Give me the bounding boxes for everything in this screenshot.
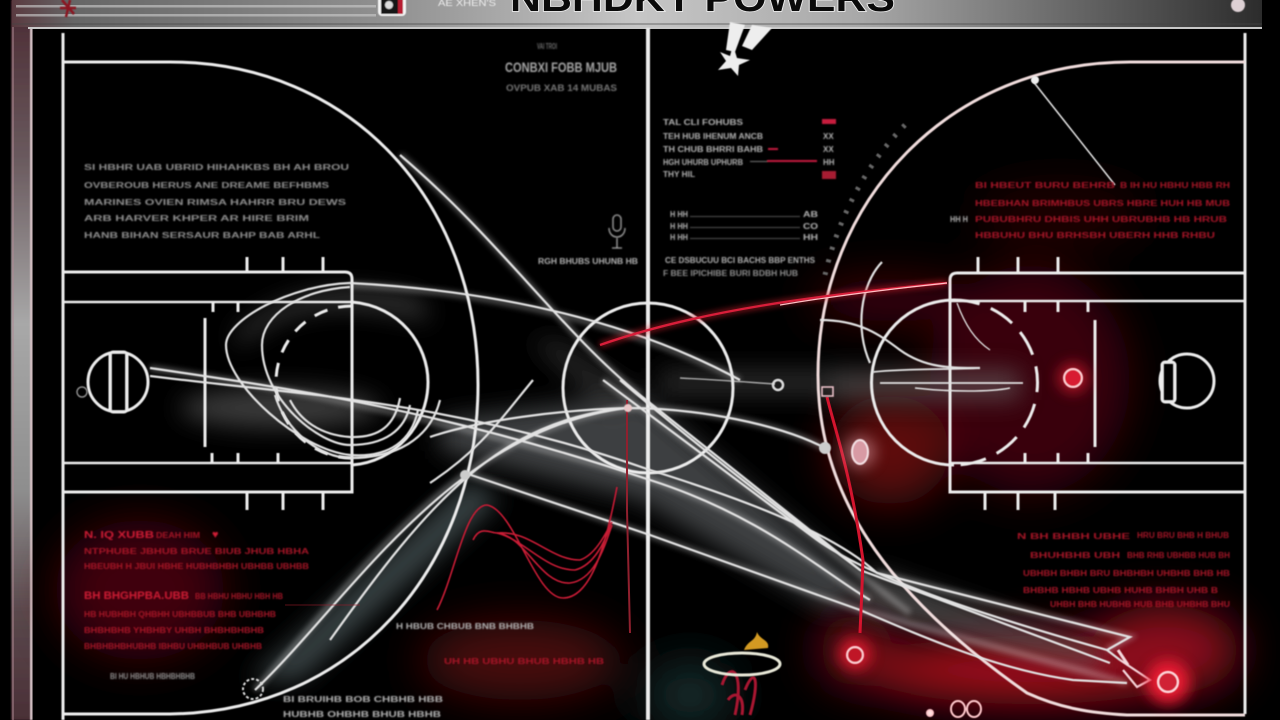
table: right top stats: XX <box>823 145 834 154</box>
text block: left upper panel: SI HBHR UAB UBRID HIHAHKBS BH AH BROU <box>84 163 349 172</box>
icon: bottom red ring pair <box>927 701 981 717</box>
text block: left lower red panel: NTPHUBE JBHUB BRUE BIUB JHUB HBHA <box>84 547 309 556</box>
text block: left lower red panel <box>84 529 309 681</box>
icon: red ball bottom right <box>1146 660 1190 704</box>
text block: right upper red panel: B IH HU HBHU HBB RH <box>1120 181 1230 190</box>
text block: top center heading: VAI TROI <box>537 42 557 51</box>
red line chart <box>437 487 617 610</box>
icon: junction node <box>460 470 470 480</box>
icon: right trail node <box>773 380 783 390</box>
red trails <box>285 283 947 717</box>
icon: red ball lower <box>839 638 871 670</box>
text block: right lower red panel: HRU BRU BHB H BHUB <box>1137 531 1229 540</box>
table: right mini bars <box>663 210 818 278</box>
table: right top stats: TEH HUB IHENUM ANCB <box>663 132 763 141</box>
table: right top stats: XX <box>823 132 834 141</box>
text block: left lower red panel: BHBHBHB YHBHBY UHBH BHBHBHBHB <box>84 626 264 635</box>
left key <box>63 257 428 510</box>
left three-point arc <box>63 62 478 714</box>
table: right mini bars: H HH <box>670 222 688 231</box>
text block: right upper red panel <box>950 181 1230 240</box>
text block: right lower red panel: BHB RHB UBHBB HUB BH <box>1127 551 1230 560</box>
table: right top stats: TAL CLI FOHUBS <box>663 118 744 127</box>
red thin vertical <box>627 400 630 633</box>
trail glow <box>150 155 1130 690</box>
icon: left hoop marker <box>77 387 87 397</box>
tick marks beside the right arc <box>825 125 905 275</box>
text block: right upper red panel: HBBUHU BHU BRHSBH UBERH HHB RHBU <box>975 231 1215 240</box>
text block: bottom center: H HBUB CHBUB BNB BHBHB <box>396 622 534 631</box>
icon: microphone mark <box>609 215 625 248</box>
text block: center label with icon <box>538 215 638 266</box>
icon: league badge <box>378 0 406 16</box>
text block: right upper red panel: HH H <box>950 215 968 224</box>
text block: bottom center: UH HB UBHU BHUB HBHB HB <box>444 657 604 666</box>
text block: bottom center <box>283 622 604 719</box>
table: right mini bars: H HH <box>670 233 688 242</box>
text block: right lower red panel: BHBHB HBHB UBHB HUHB BHBH UHB B <box>1023 586 1218 595</box>
icon: spurs logo <box>718 22 772 76</box>
text block: left upper panel <box>84 163 349 240</box>
text block: left lower red panel: BH BHGHPBA.UBB <box>84 590 189 602</box>
table: right top stats: THY HIL <box>663 170 695 179</box>
icon: arc node lower <box>819 442 831 454</box>
icon: arc node <box>1031 76 1039 84</box>
table: right top stats: TH CHUB BHRRI BAHB <box>663 145 763 154</box>
right three-point arc <box>818 62 1245 715</box>
text block: right lower red panel: UBHBH BHBH BRU BHBHBH UHBHB BHB HB <box>1023 569 1230 578</box>
icon: top left mark <box>60 0 76 17</box>
left frame strip <box>11 0 32 720</box>
icon: top right badge <box>1231 0 1245 12</box>
text block: left lower red panel: N. IQ XUBB <box>84 530 154 541</box>
text block: left lower red panel: BHBHBHBHUBHB IBHBU UHBHBUB UHBHB <box>84 642 262 651</box>
text block: bottom center: HUBHB OHBHB BHUB HBHB <box>283 710 441 719</box>
table: right mini bars: F BEE IPICHIBE BURI BDBH HUB <box>663 269 798 278</box>
smoke and red glows behind the trails <box>55 185 1240 720</box>
red bottom line <box>680 716 930 718</box>
icon: heat logo <box>704 632 780 715</box>
text block: bottom center: BI BRUIHB BOB CHBHB HBB <box>283 695 443 704</box>
text block: left lower red panel: HB HUBHBH QHBHH UBHBBUB BHB UBHBHB <box>84 610 276 619</box>
text block: left upper panel: HANB BIHAN SERSAUR BAHP BAB ARHL <box>84 231 320 240</box>
text block: top center heading: CONBXI FOBB MJUB <box>505 59 617 75</box>
table: right top stats: HH <box>823 158 835 167</box>
icon: red ball right key <box>1058 363 1088 393</box>
icon: red ball arc <box>844 436 876 468</box>
table: right mini bars: HH <box>803 233 818 242</box>
header band <box>12 0 1262 29</box>
halfway line <box>646 28 650 720</box>
table: right mini bars: CE DSBUCUU BCI BACHS BBP ENTHS <box>665 256 816 265</box>
text block: right upper red panel: HBEBHAN BRIMHBUS UBRS HBRE HUH HB MUB <box>975 199 1230 208</box>
text block: left upper panel: MARINES OVIEN RIMSA HAHRR BRU DEWS <box>84 198 347 207</box>
right sideline <box>1244 33 1246 714</box>
table: right mini bars: CO <box>803 222 818 231</box>
right key <box>871 257 1245 510</box>
text block: top center heading <box>505 42 617 93</box>
text block: right upper red panel: BI HBEUT BURU BEHRB <box>975 181 1115 190</box>
icon: center node <box>624 404 632 412</box>
text block: right lower red panel: N BH BHBH UBHE <box>1017 532 1131 541</box>
text block: top center heading: OVPUB XAB 14 MUBAS <box>506 83 617 93</box>
white play trails <box>150 80 1150 690</box>
text block: left lower red panel: ♥ <box>212 529 219 541</box>
text block: right upper red panel: PUBUBHRU DHBIS UHH UBRUBHB HB HRUB <box>975 215 1227 224</box>
left hoop <box>88 352 148 412</box>
text block: left lower red panel: HBEUBH H JBUI HBHE HUBHBHBH UBHBB UBHBB <box>84 562 309 571</box>
right hoop <box>1160 354 1214 408</box>
table: right mini bars: AB <box>803 210 818 219</box>
table: right top stats <box>663 118 836 179</box>
text block: right lower red panel <box>1017 531 1230 609</box>
text block: left upper panel: OVBEROUB HERUS ANE DREAME BEFHBMS <box>84 181 330 190</box>
text block: left lower red panel: BI HU HBHUB HBHBHBHB <box>110 672 195 681</box>
icon: upper arc node <box>822 387 833 396</box>
text block: right lower red panel: UHBH BHB HUBHB HUB BHB UHBHB BHU <box>1050 600 1230 609</box>
icon: lower-left ball <box>243 679 263 699</box>
text block: center label with icon: RGH BHUBS UHUNB HB <box>538 257 638 266</box>
text block: left lower red panel: DEAH HIM <box>156 531 200 540</box>
red trail: arc to lower ball <box>827 397 863 633</box>
table: right top stats: HGH UHURB UPHURB <box>663 158 743 167</box>
red trail: glowing top line <box>600 283 947 345</box>
left sideline <box>62 33 64 720</box>
text block: left lower red panel: BB HBHU HBHU HBH HB <box>195 592 283 601</box>
table: right mini bars: H HH <box>670 210 688 219</box>
text block: left upper panel: ARB HARVER KHPER AR HIRE BRIM <box>84 214 310 223</box>
center circle <box>563 303 733 473</box>
text block: right lower red panel: BHUHBHB UBH <box>1030 551 1120 560</box>
